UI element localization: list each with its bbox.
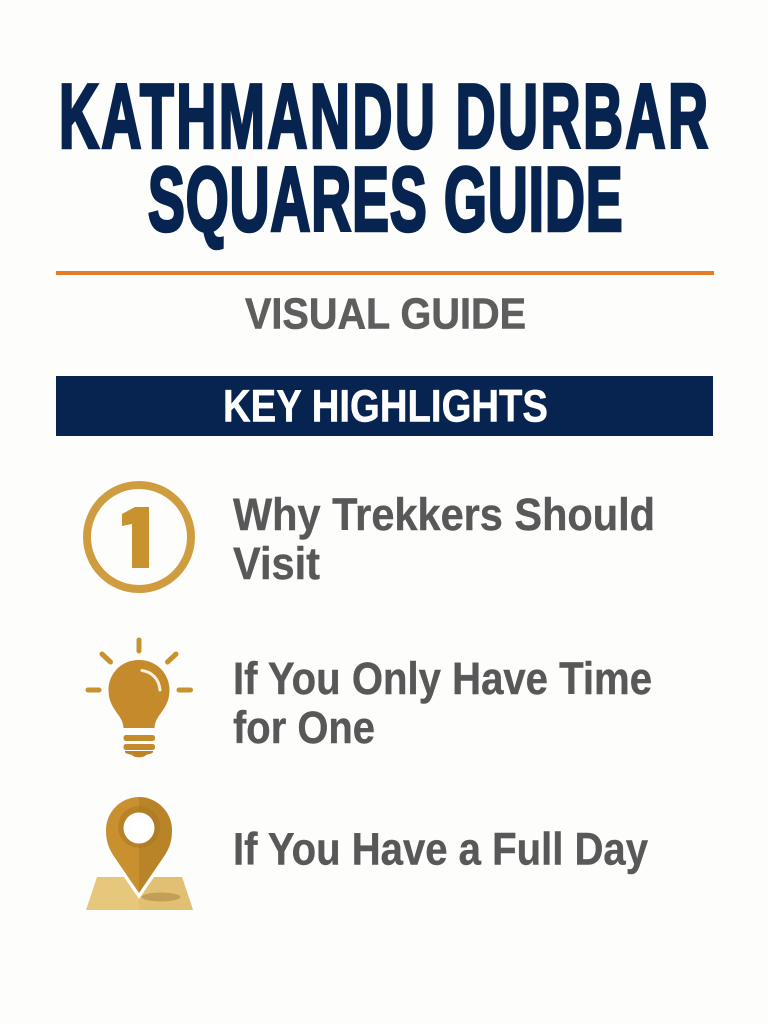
text: why trekkers should visit: Why Trekkers Should xyxy=(233,489,655,540)
title: SQUARES GUIDE xyxy=(148,148,623,250)
banner: key highlights xyxy=(56,376,713,436)
text: why trekkers should visit xyxy=(233,489,655,589)
icon: map pin xyxy=(86,794,193,910)
icon: light bulb xyxy=(88,640,190,757)
highlight 1 xyxy=(87,485,655,589)
highlight 3 xyxy=(86,794,648,910)
text: if you only have time for one: If You Only Have Time xyxy=(233,653,652,704)
text: if you only have time for one: for One xyxy=(233,702,375,753)
highlight 2 xyxy=(88,640,652,757)
text: if you have a full day: If You Have a Full Day xyxy=(233,824,648,874)
banner: key highlights: KEY HIGHLIGHTS xyxy=(223,380,548,432)
subtitle: VISUAL GUIDE xyxy=(245,290,526,338)
icon: numbered circle xyxy=(87,485,191,589)
text: if you only have time for one xyxy=(233,653,652,753)
text: why trekkers should visit: Visit xyxy=(233,538,320,589)
title xyxy=(59,65,708,250)
title: KATHMANDU DURBAR xyxy=(59,65,708,167)
